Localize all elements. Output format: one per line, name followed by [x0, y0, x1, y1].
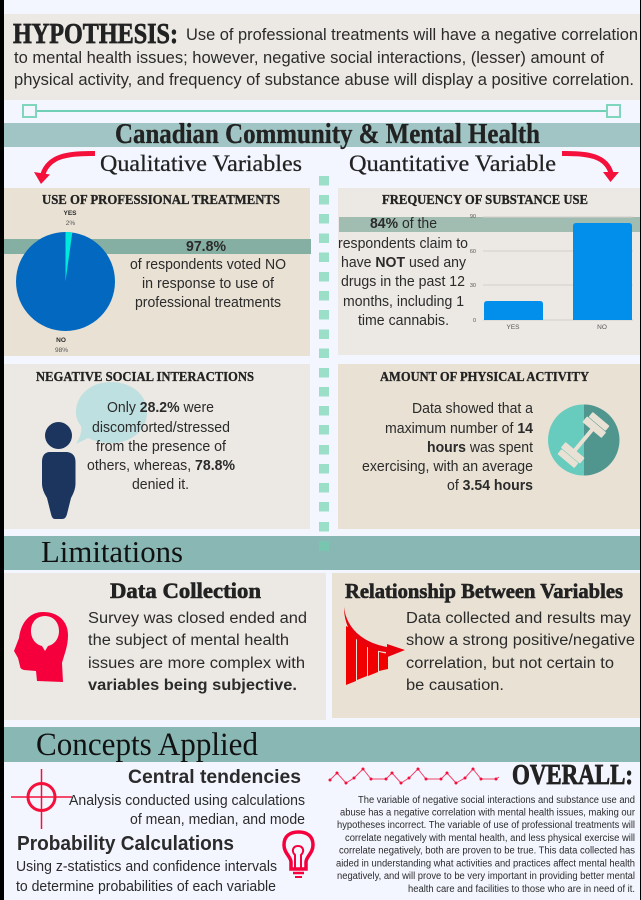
- icon: head: [14, 612, 68, 682]
- callout text: months, including 1: [343, 294, 464, 310]
- pie chart: YES: [63, 210, 77, 217]
- hypothesis text: physical activity, and frequency of substance abuse will display a positive correlation.: [14, 70, 634, 89]
- panel: negative social interactions: [4, 364, 310, 529]
- callout text: Only 28.2% were: [107, 400, 214, 416]
- text block: [88, 610, 307, 694]
- callout text: have NOT used any: [341, 255, 467, 271]
- central tendencies: Analysis conducted using calculations: [69, 793, 305, 809]
- probability calculations: to determine probabilities of each variable: [16, 879, 276, 895]
- callout text: in response to use of: [142, 276, 274, 292]
- text block: the subject of mental health: [88, 632, 289, 649]
- bar chart: [470, 214, 633, 331]
- bar chart: 30: [470, 283, 476, 289]
- callout text: hours was spent: [427, 440, 533, 456]
- concepts applied band: [4, 727, 640, 763]
- pie chart: 2%: [66, 220, 75, 227]
- panel: use of professional treatments: [4, 188, 311, 356]
- callout text: exercising, with an average: [362, 459, 533, 475]
- callout text: others, whereas, 78.8%: [87, 458, 235, 474]
- callout text: professional treatments: [135, 295, 281, 311]
- text block: Data collected and results may: [406, 610, 631, 627]
- limitations band: Limitations: [41, 534, 183, 569]
- text block: [406, 610, 635, 694]
- callout text: [87, 400, 235, 493]
- arrow: left red: [34, 153, 95, 184]
- panel: hypothesis: [4, 14, 640, 100]
- hypothesis text: [14, 25, 638, 89]
- callout text: from the presence of: [96, 439, 226, 455]
- icon: light bulb: [284, 832, 313, 877]
- heading: quantitative variable: Quantitative Variable: [349, 151, 556, 176]
- callout text: time cannabis.: [358, 313, 449, 329]
- callout text: of 3.54 hours: [447, 478, 533, 494]
- bar chart: YES: [506, 324, 520, 331]
- text block: variables being subjective.: [88, 677, 297, 694]
- text block: Survey was closed ended and: [88, 610, 307, 627]
- pie chart: 98%: [55, 347, 68, 354]
- callout text: [362, 401, 533, 494]
- text block: be causation.: [406, 677, 504, 694]
- callout text: maximum number of 14: [385, 421, 533, 437]
- callout text: of respondents voted NO: [130, 257, 286, 273]
- icon: speech bubble: [76, 382, 147, 444]
- panel heading: FREQUENCY OF SUBSTANCE USE: [382, 193, 588, 208]
- panel heading: USE OF PROFESSIONAL TREATMENTS: [42, 193, 280, 208]
- callout text: [130, 239, 286, 311]
- band: [339, 217, 640, 232]
- panel heading: Relationship Between Variables: [345, 579, 623, 603]
- bar chart: 90: [470, 214, 476, 220]
- callout text: denied it.: [132, 477, 189, 493]
- overall text block: [336, 795, 636, 895]
- panel: data collection: [4, 573, 326, 720]
- divider squares: [319, 176, 329, 551]
- text block: correlation, but not certain to: [406, 655, 614, 672]
- panel: relationship between variables: [332, 573, 640, 718]
- panel heading: Data Collection: [110, 578, 261, 603]
- bar chart: NO: [597, 324, 607, 331]
- central tendencies: of mean, median, and mode: [130, 812, 305, 828]
- icon: falling chart arrow: [344, 607, 405, 685]
- limitations band: [4, 534, 640, 570]
- decorative zigzag line: [328, 768, 499, 784]
- title band: Canadian Community & Mental Health: [115, 119, 540, 150]
- hypothesis text: to mental health issues; however, negative social interactions, (lesser) amount of: [14, 48, 604, 67]
- band: [4, 239, 311, 254]
- callout text: 97.8%: [186, 239, 226, 255]
- central tendencies: [69, 766, 305, 828]
- callout text: Data showed that a: [412, 401, 533, 417]
- connector line: [23, 105, 620, 117]
- callout text: [338, 216, 468, 329]
- icon: crosshair: [11, 769, 72, 829]
- pie chart: [16, 210, 115, 354]
- callout text: drugs in the past 12: [341, 274, 465, 290]
- panel heading: AMOUNT OF PHYSICAL ACTIVITY: [380, 370, 589, 385]
- text block: issues are more complex with: [88, 655, 305, 672]
- pie chart: NO: [56, 337, 66, 344]
- icon: person: [42, 422, 76, 519]
- probability calculations: Probability Calculations: [17, 832, 234, 855]
- bar chart: 60: [470, 249, 476, 255]
- hypothesis text: Use of professional treatments will have a negative correlation: [186, 25, 638, 44]
- heading: hypothesis: HYPOTHESIS:: [13, 18, 178, 50]
- text block: show a strong positive/negative: [406, 632, 635, 649]
- concepts applied band: Concepts Applied: [36, 727, 258, 763]
- icon: dumbbell: [548, 404, 620, 476]
- panel: frequency of substance use: [338, 188, 640, 355]
- panel: amount of physical activity: [338, 364, 640, 529]
- probability calculations: Using z-statistics and confidence intervals: [16, 859, 277, 875]
- probability calculations: [16, 832, 277, 895]
- arrow: right red: [562, 153, 619, 182]
- callout text: respondents claim to: [338, 236, 468, 252]
- bar chart: 0: [473, 318, 476, 324]
- callout text: discomforted/stressed: [92, 420, 230, 436]
- central tendencies: Central tendencies: [128, 766, 301, 788]
- callout text: 84% of the: [370, 216, 437, 232]
- panel heading: NEGATIVE SOCIAL INTERACTIONS: [36, 370, 254, 385]
- heading: qualitative variables: Qualitative Variables: [100, 151, 302, 176]
